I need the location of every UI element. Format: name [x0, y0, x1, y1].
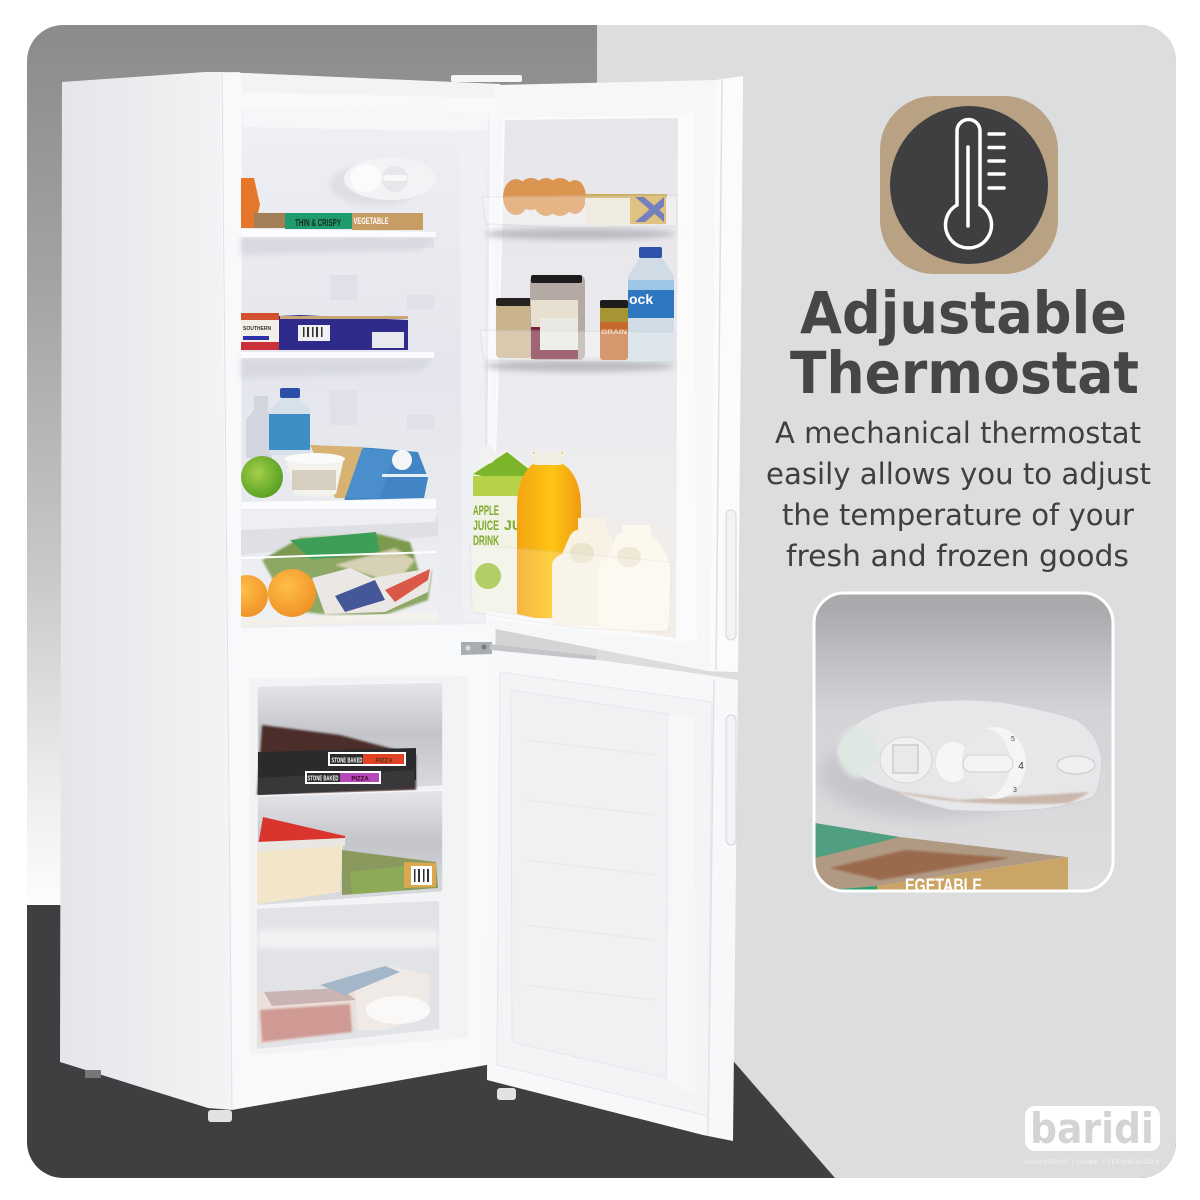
- drawer three: [256, 900, 440, 1050]
- drawer one: PIZZA: [351, 776, 369, 782]
- baridi logo: baridi: [1030, 1104, 1154, 1153]
- description text: easily allows you to adjust: [766, 457, 1151, 491]
- heading: Thermostat: [790, 339, 1139, 407]
- door handle recess: [726, 510, 736, 640]
- shelf two: [241, 352, 434, 378]
- thermostat housing close-up: 5: [1011, 736, 1015, 743]
- drawer one: PIZZA: [375, 758, 393, 764]
- heading: [790, 279, 1139, 407]
- fridge door: [470, 76, 743, 672]
- description text: [766, 416, 1151, 573]
- photo inset: thermostat dial close-up: [814, 593, 1113, 897]
- fridge compartment: [239, 111, 490, 628]
- baridi logo: INNOVATIVE | HOME | TECHNOLOGY: [1024, 1159, 1160, 1166]
- door tray: juice and milk: DRINK: [473, 532, 499, 548]
- shelf three: [241, 499, 436, 509]
- drawer one: STONE BAKED: [332, 758, 362, 764]
- door tray: juice and milk: JU: [504, 517, 522, 533]
- door tray: eggs and butter: [482, 178, 677, 240]
- door tray: juice and milk: JUICE: [473, 517, 499, 533]
- freezer compartment: [250, 676, 468, 1055]
- door tray: juice and milk: [470, 446, 672, 632]
- handle recess: [726, 715, 736, 845]
- fridge feet: [85, 1070, 516, 1122]
- door tray: jars and water: [480, 247, 675, 372]
- drawer two: [257, 790, 443, 906]
- shelf top food: [241, 178, 423, 230]
- description text: A mechanical thermostat: [775, 416, 1141, 450]
- thermostat housing close-up: 4: [1018, 761, 1024, 772]
- description text: the temperature of your: [782, 498, 1134, 532]
- thermostat housing close-up: [820, 700, 1102, 817]
- box close-up: EGETABLE: [905, 876, 982, 897]
- description text: fresh and frozen goods: [786, 539, 1129, 573]
- shelf one: [241, 229, 436, 255]
- box close-up: [816, 823, 1068, 890]
- shelf middle food: [241, 313, 408, 350]
- door tray: jars and water: ock: [629, 291, 653, 307]
- door tray: jars and water: GRAIN: [601, 329, 627, 336]
- crisper drawer: [241, 512, 438, 620]
- top hinge: [451, 75, 522, 82]
- door hinge: [461, 642, 596, 660]
- fridge body: [60, 72, 522, 1110]
- shelf middle food: SOUTHERN: [243, 326, 271, 332]
- door tray: juice and milk: APPLE: [473, 502, 499, 518]
- lower door: [487, 645, 738, 1141]
- thermostat housing close-up: 3: [1013, 787, 1017, 794]
- shelf lower food: [241, 388, 428, 500]
- shelf top food: VEGETABLE: [354, 216, 388, 226]
- icon: thermometer: [880, 96, 1058, 274]
- lower door ribs: [525, 740, 655, 1000]
- shelf top food: THIN & CRISPY: [295, 218, 341, 229]
- drawer one: [257, 682, 443, 796]
- thermostat housing: [330, 158, 436, 206]
- shelf rails: [330, 238, 434, 429]
- drawer one: STONE BAKED: [308, 776, 338, 782]
- heading: Adjustable: [800, 279, 1127, 347]
